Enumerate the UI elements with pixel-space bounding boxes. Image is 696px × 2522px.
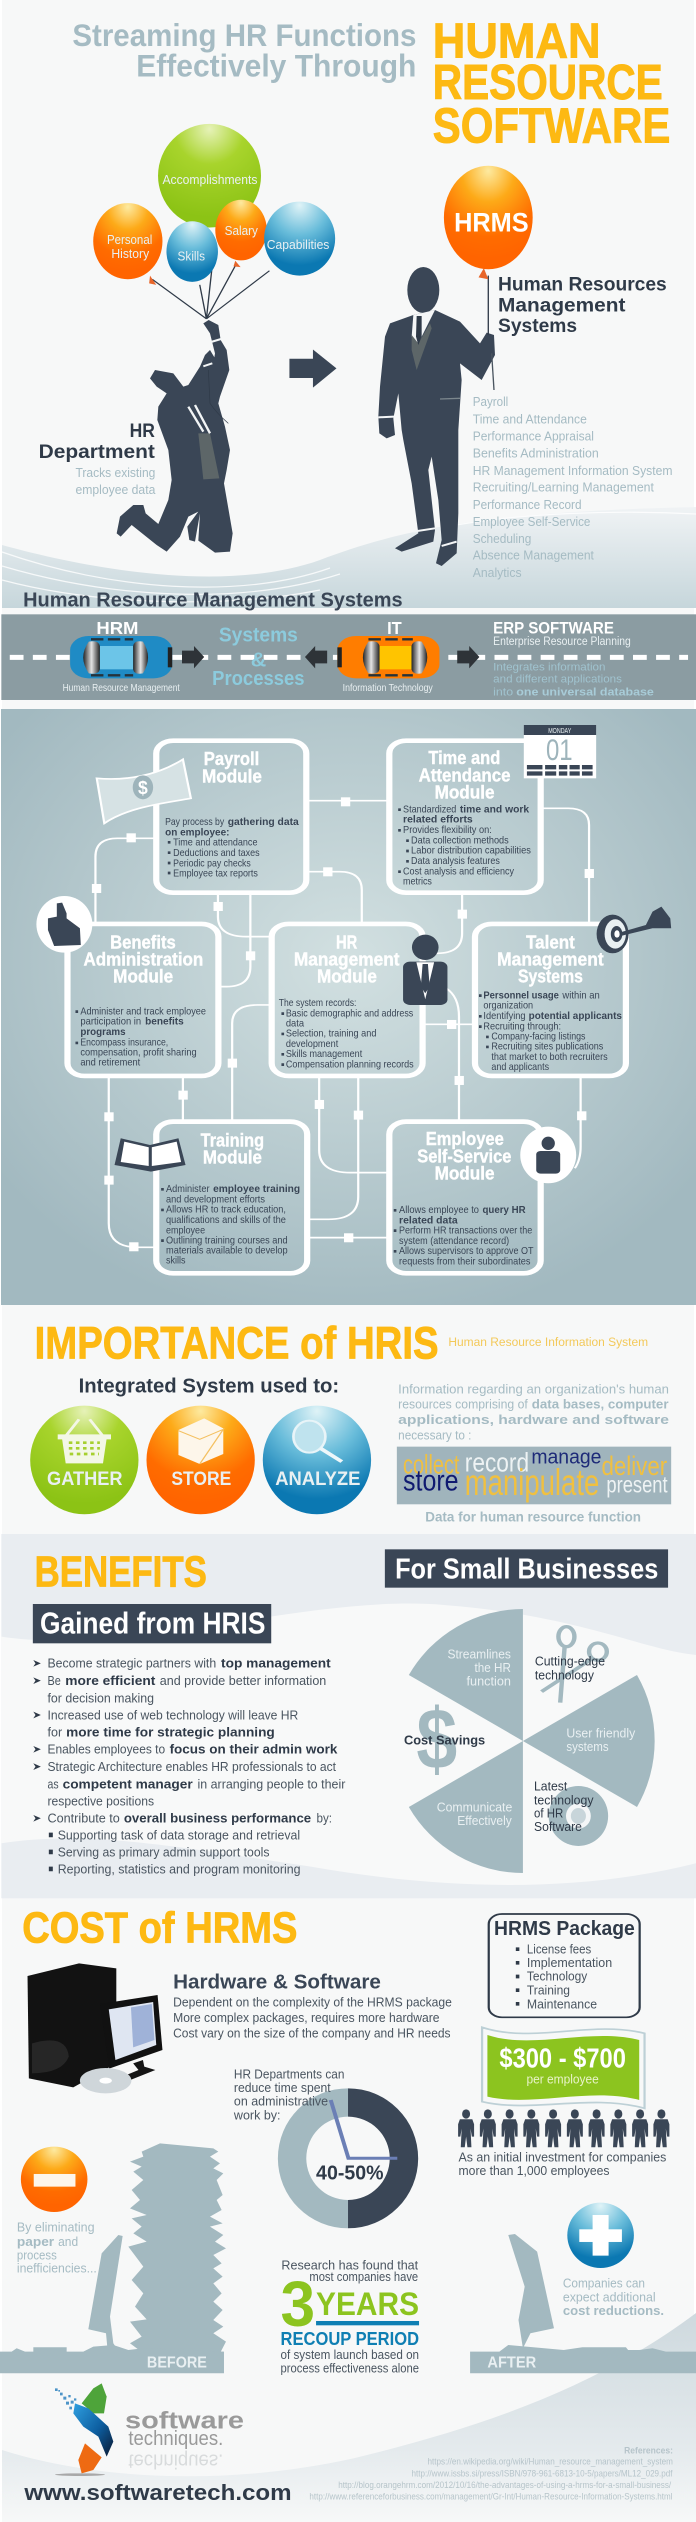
text: talent management: Personnel usage <box>483 990 559 1001</box>
text: training module: employee <box>166 1225 205 1236</box>
stat: 3 years recoup period: YEARS <box>316 2286 419 2322</box>
module titles: Training <box>201 1130 264 1151</box>
text: initial investment: more than 1,000 employees <box>459 2164 610 2178</box>
icon: computer tower and monitor <box>28 1963 162 2093</box>
title: streaming HR functions <box>72 19 416 84</box>
text: benefits module: benefits <box>145 1016 184 1027</box>
text: information regarding: necessary to : <box>398 1429 471 1443</box>
module titles: HR <box>336 931 357 953</box>
list: benefits gained: overall business performance <box>124 1812 311 1826</box>
list: HRMS functions: Absence Management <box>473 549 594 563</box>
icon: calendar: MONDAY <box>548 726 571 735</box>
before scene: paper stack, monitor and desk <box>0 2143 226 2373</box>
icon: HR manager <box>403 935 447 1005</box>
list: benefits gained: in arranging people to their <box>198 1777 345 1792</box>
text: training module: Administer <box>166 1183 210 1194</box>
connector lines <box>95 801 589 1247</box>
list: benefits gained: more time for strategic planning <box>66 1726 275 1740</box>
text: time and attendance module: Data analysis features <box>411 855 500 867</box>
text: hardware and software <box>173 1970 452 2041</box>
list: benefits gained: Contribute to <box>47 1812 120 1826</box>
text: talent management: that market to both recruiters <box>491 1051 608 1063</box>
icon: minus balloon <box>21 2147 87 2212</box>
arrow: HR department to HRMS <box>289 350 336 388</box>
list: benefits gained: Serving as primary admin support tools <box>58 1846 270 1860</box>
pie labels: function <box>467 1675 511 1689</box>
list: HRMS functions: Payroll <box>473 395 508 410</box>
module titles: Module <box>317 966 377 987</box>
module titles: Benefits <box>110 931 176 953</box>
title: streaming HR functions: Streaming HR Functions <box>72 19 416 53</box>
icon: calendar: 01 <box>546 735 573 767</box>
module titles: Self-Service <box>417 1145 511 1167</box>
logo: software techniques: techniques. <box>128 2428 223 2450</box>
heading: importance of HRIS: IMPORTANCE of HRIS <box>35 1318 439 1369</box>
panel: road of systems <box>1 589 696 700</box>
text: HR management module: Selection, training and <box>286 1028 376 1039</box>
text: by eliminating paper: inefficiencies... <box>17 2262 97 2276</box>
background wave: footer <box>2 2313 696 2522</box>
text: employee self-service module: Allows employee to <box>399 1204 479 1215</box>
text: hardware and software: Hardware & Software <box>173 1970 381 1993</box>
pie labels: systems <box>566 1741 609 1754</box>
banner: gained from HRIS: Gained from HRIS <box>40 1605 265 1640</box>
pie labels: of HR <box>534 1807 563 1821</box>
text: talent management: potential applicants <box>529 1010 622 1022</box>
car: orange IT <box>337 636 439 678</box>
heading: human resources management systems: Management <box>498 294 625 316</box>
car: blue HRM <box>70 636 172 678</box>
module titles: Attendance <box>419 765 510 786</box>
text: payroll module: Employee tax reports <box>173 868 258 879</box>
balloons: HR department data <box>93 124 335 285</box>
box: HRMS package: License fees <box>527 1942 591 1957</box>
module titles: Module <box>435 781 495 803</box>
heading: HR department <box>39 420 156 497</box>
word cloud: manage <box>531 1445 601 1468</box>
pie labels: Software <box>534 1821 582 1834</box>
list: benefits gained: competent manager <box>63 1777 193 1792</box>
heading: integrated system: Integrated System used to: <box>79 1375 339 1398</box>
text: hardware and software: Cost vary on the size of the company and HR needs <box>173 2026 451 2041</box>
text: payroll module <box>165 816 299 879</box>
text: HR departments can reduce: reduce time spent <box>234 2081 331 2095</box>
balloons: HR department data: Salary <box>225 224 258 239</box>
circle: analyze: ANALYZE <box>275 1467 360 1489</box>
module titles <box>83 747 604 1184</box>
list: benefits gained: top management <box>221 1657 331 1671</box>
text: benefits module: Administer and track employee <box>80 1006 206 1017</box>
heading: human resources management systems: Systems <box>498 315 577 337</box>
module titles: Employee <box>426 1128 504 1149</box>
pie labels: Cost Savings <box>404 1734 485 1748</box>
text: HR departments can reduce <box>233 2067 344 2123</box>
icon: open book <box>115 1138 186 1172</box>
banner: gained from HRIS <box>33 1604 271 1643</box>
pie labels: Effectively <box>457 1815 512 1828</box>
box: HRMS package <box>489 1914 640 2017</box>
text: HR departments can reduce: on administrative <box>234 2095 328 2109</box>
text: payroll module: on employee: <box>165 827 229 838</box>
module titles: Talent <box>526 931 575 953</box>
text: employee self-service module <box>394 1204 534 1267</box>
icon: employee <box>520 1127 576 1183</box>
list: benefits gained: Reporting, statistics and program monitoring <box>58 1863 301 1877</box>
text: employee self-service module: Perform HR transactions over the <box>399 1225 533 1236</box>
circle: gather: GATHER <box>47 1467 123 1489</box>
pie labels: Communicate <box>437 1801 512 1815</box>
text: HR departments can reduce: work by: <box>233 2108 281 2123</box>
text: hardware and software: More complex packages, requires more hardware <box>173 2011 440 2025</box>
text: time and attendance module: Cost analysis and efficiency <box>403 866 514 877</box>
heading: HR department: Department <box>39 441 155 462</box>
text: by eliminating paper: and <box>58 2235 78 2249</box>
balloons: HR department data: Capabilities <box>267 238 329 253</box>
label: ERP software: ERP SOFTWARE <box>493 619 614 638</box>
list: HRMS functions: Benefits Administration <box>473 447 599 461</box>
list: benefits gained: Become strategic partners with <box>47 1657 216 1671</box>
circle: store: STORE <box>171 1467 231 1489</box>
list: benefits gained: Strategic Architecture enables HR professionals to act <box>47 1760 337 1774</box>
list: HRMS functions: Analytics <box>473 566 522 581</box>
banner: price per employee: $300 - $700 <box>499 2042 626 2074</box>
box: HRMS package: Technology <box>527 1970 587 1984</box>
panel: benefits background <box>1 1534 696 1898</box>
text: HR management module <box>279 997 414 1070</box>
label: systems and processes: Systems <box>219 624 298 647</box>
icon row: employees <box>458 2109 669 2147</box>
module titles: Module <box>203 1146 262 1168</box>
icon: money bill <box>97 759 191 823</box>
stat: 3 years recoup period: 3 <box>281 2268 315 2340</box>
list: benefits gained: Be <box>47 1674 61 1688</box>
text: training module: qualifications and skills of the <box>166 1214 286 1225</box>
text: talent management: and applicants <box>491 1061 549 1073</box>
balloons: HR department data: History <box>111 247 150 261</box>
text: talent management <box>479 990 622 1073</box>
logo: software techniques: techniques. <box>128 2449 223 2471</box>
label: systems and processes: & <box>251 649 266 672</box>
pie labels: Cutting-edge <box>535 1655 605 1669</box>
text: training module: materials available to develop <box>166 1245 288 1256</box>
stat: 3 years recoup period <box>281 2258 419 2376</box>
list: benefits gained: respective positions <box>47 1794 154 1809</box>
module titles: Systems <box>518 966 583 987</box>
circle: store <box>146 1406 255 1514</box>
list: benefits gained: Increased use of web technology will leave HR <box>47 1708 298 1723</box>
icon: target and dart <box>597 907 671 953</box>
label: systems and processes: Processes <box>212 667 305 690</box>
list: benefits gained: for decision making <box>47 1691 154 1706</box>
heading: cost of HRMS: COST of HRMS <box>22 1904 297 1952</box>
text: payroll module: Pay process by <box>165 816 224 828</box>
label: ERP software <box>493 619 654 698</box>
text: HR management module: data <box>286 1018 304 1029</box>
text: benefits module: compensation, profit sharing <box>80 1047 197 1058</box>
circle: analyze <box>263 1406 371 1514</box>
pie labels: Latest <box>534 1780 568 1794</box>
text: hardware and software: Dependent on the complexity of the HRMS package <box>173 1996 452 2010</box>
stat: 3 years recoup period: Research has found that <box>281 2258 419 2273</box>
label: ERP software: into <box>493 685 513 698</box>
text: companies can expect: Companies can <box>563 2277 645 2291</box>
website url: www.softwaretech.com <box>23 2481 292 2505</box>
silhouette: kneeling man <box>117 320 233 553</box>
list: HRMS functions: Performance Appraisal <box>473 430 594 444</box>
pie labels: technology <box>535 1669 594 1683</box>
module titles: Module <box>435 1162 495 1184</box>
list: HRMS functions: Employee Self-Service <box>473 515 590 530</box>
text: HR management module: Basic demographic and address <box>286 1008 413 1019</box>
text: by eliminating paper <box>17 2221 97 2276</box>
label: HRM: Human Resource Management <box>63 682 180 694</box>
banner: price per employee <box>482 2027 645 2108</box>
after scene: monitor and desk <box>470 2234 696 2373</box>
text: initial investment <box>459 2151 666 2178</box>
text: training module: Allows HR to track education, <box>166 1204 286 1215</box>
text: information regarding: applications, hardware and software <box>398 1414 669 1427</box>
panel: importance of HRIS <box>30 1318 671 1525</box>
icon: compact disc <box>549 1786 608 1846</box>
icon: money bill: $ <box>138 777 148 798</box>
text: time and attendance module: metrics <box>403 876 432 887</box>
balloons: HR department data: Accomplishments <box>162 173 257 187</box>
list: benefits gained: for <box>47 1726 62 1740</box>
list: benefits gained: focus on their admin work <box>170 1743 338 1757</box>
text: training module: Outlining training courses and <box>166 1235 288 1246</box>
heading: human resources management systems: Human Resources <box>498 273 667 295</box>
heading: HR department: Tracks existing <box>75 466 155 481</box>
label: systems and processes <box>212 624 305 690</box>
list: HRMS functions: Scheduling <box>473 532 531 547</box>
road dashes <box>10 650 688 665</box>
text: talent management: within an <box>562 990 600 1001</box>
pie labels: Streamlines <box>447 1648 511 1662</box>
icon: thumbs up <box>36 896 92 953</box>
heading: benefits: BENEFITS <box>35 1548 207 1596</box>
arrow: IT to systems <box>305 646 327 668</box>
list: benefits gained <box>33 1657 345 1877</box>
panel: benefits <box>33 1548 668 1877</box>
text: employee self-service module: related data <box>399 1215 458 1226</box>
label: before: BEFORE <box>147 2354 207 2371</box>
box: HRMS package: Training <box>527 1983 570 1998</box>
circle: gather <box>30 1406 138 1514</box>
pie labels: User friendly <box>566 1727 636 1741</box>
box: HRMS package: Implementation <box>527 1956 612 1970</box>
module titles: Payroll <box>204 748 259 769</box>
arrow: HRM to systems <box>182 646 204 668</box>
road <box>1 614 696 700</box>
text: employee self-service module: requests from their subordinates <box>399 1256 531 1267</box>
text: HR management module: Compensation planning records <box>286 1059 414 1070</box>
text: companies can expect: cost reductions. <box>563 2304 664 2318</box>
label: IT: Information Technology <box>343 682 433 694</box>
balloon strings <box>152 263 488 335</box>
label: HRM <box>63 620 180 694</box>
text: time and attendance module: Data collection methods <box>411 835 509 846</box>
text: by eliminating paper: paper <box>17 2235 54 2249</box>
text: benefits module: programs <box>80 1026 126 1038</box>
list: benefits gained: and provide better information <box>160 1674 326 1688</box>
text: employee self-service module: system (attendance record) <box>399 1235 509 1246</box>
panel: modules background <box>1 709 696 1305</box>
box: HRMS package: HRMS Package <box>494 1917 635 1940</box>
box: HRMS package: Maintenance <box>527 1997 597 2012</box>
list: HRMS functions: Recruiting/Learning Management <box>473 481 654 495</box>
label: IT <box>343 620 433 694</box>
panel: header and balloons <box>39 14 673 581</box>
list: benefits gained: Supporting task of data storage and retrieval <box>58 1829 300 1843</box>
module titles: Time and <box>428 747 500 768</box>
list: HRMS functions: Performance Record <box>473 498 582 513</box>
title: human resource software: HUMAN <box>433 14 601 68</box>
label: ERP software: one universal database <box>516 685 654 698</box>
list: benefits gained: as <box>47 1777 59 1792</box>
text: HR departments can reduce: HR Departments can <box>234 2067 344 2082</box>
text: time and attendance module: Labor distribution capabilities <box>411 845 531 856</box>
references: References: <box>624 2446 673 2456</box>
module titles: Module <box>113 966 173 987</box>
module titles: Management <box>497 949 604 970</box>
logo: software techniques <box>55 2383 244 2476</box>
text: payroll module: Deductions and taxes <box>173 847 260 859</box>
module titles: Administration <box>83 949 203 970</box>
panel: HR modules <box>36 725 671 1273</box>
text: employee self-service module: Allows supervisors to approve OT <box>399 1245 534 1256</box>
text: training module: skills <box>166 1255 186 1266</box>
icon: calendar <box>524 725 596 778</box>
list: benefits gained: more efficient <box>65 1674 156 1688</box>
pie labels <box>404 1648 636 1834</box>
heading: HR department: HR <box>130 420 155 442</box>
donut chart: 40-50%: 40-50% <box>316 2161 384 2184</box>
module titles: Management <box>294 949 400 970</box>
text: time and attendance module: Provides flexibility on: <box>403 824 492 836</box>
panel: savings and footer <box>17 2221 673 2505</box>
balloons: HR department data: Skills <box>178 250 205 264</box>
pie labels: technology <box>534 1794 594 1808</box>
text: companies can expect <box>563 2277 664 2318</box>
word cloud: collect <box>403 1450 460 1479</box>
title: streaming HR functions: Effectively Through <box>136 49 416 84</box>
heading: human resources management systems <box>498 273 667 337</box>
text: payroll module: gathering data <box>228 816 299 828</box>
balloon: HRMS: HRMS <box>454 208 529 238</box>
text: HR management module: The system records: <box>279 997 356 1009</box>
label: IT: IT <box>387 620 402 638</box>
references <box>309 2446 673 2502</box>
text: talent management: Company-facing listings <box>491 1031 586 1042</box>
text: time and attendance module: time and work <box>460 804 530 815</box>
text: information regarding <box>398 1383 669 1443</box>
word cloud: record <box>465 1448 529 1478</box>
text: by eliminating paper: process <box>17 2248 57 2263</box>
title: human resource software <box>433 14 670 153</box>
label: after: AFTER <box>487 2354 536 2371</box>
text: talent management: organization <box>483 1000 533 1011</box>
word cloud: store <box>403 1465 459 1497</box>
text: payroll module: Periodic pay checks <box>173 858 251 869</box>
list: HRMS functions: Time and Attendance <box>473 413 587 427</box>
text: benefits module: participation in <box>80 1016 141 1027</box>
text: training module: employee training <box>213 1183 300 1194</box>
stat: 3 years recoup period: RECOUP PERIOD <box>281 2328 419 2349</box>
text: talent management: Recruiting through: <box>483 1021 561 1032</box>
text: benefits module: and retirement <box>80 1057 141 1068</box>
text: benefits module <box>75 1006 206 1068</box>
label: ERP software: and different applications <box>493 672 622 685</box>
silhouette: standing man <box>378 267 495 566</box>
arrow: IT to ERP <box>457 646 479 668</box>
connector nodes <box>92 797 594 1251</box>
icon: plus balloon <box>567 2203 634 2268</box>
text: talent management: Identifying <box>483 1010 526 1022</box>
pie labels: the HR <box>475 1662 511 1675</box>
heading: human resource management systems: Human Resource Management Systems <box>23 589 403 611</box>
text: companies can expect: expect additional <box>563 2290 656 2305</box>
list: benefits gained: Enables employees to <box>47 1743 165 1757</box>
pie chart: small business benefits <box>404 1609 655 1873</box>
balloons: HR department data: Personal <box>107 233 152 248</box>
donut chart: 40-50% <box>278 2088 418 2228</box>
stat: 3 years recoup period: most companies have <box>309 2270 418 2284</box>
text: training module: and development efforts <box>166 1194 265 1205</box>
text: HR management module: development <box>286 1038 339 1050</box>
icon: dollar sign: $ <box>416 1690 457 1787</box>
label: HRM: HRM <box>96 620 138 638</box>
text: training module <box>161 1183 300 1266</box>
text: talent management: Recruiting sites publications <box>491 1041 603 1052</box>
logo: software techniques: software <box>125 2407 244 2434</box>
text: HR management module: Skills management <box>286 1048 363 1060</box>
text: time and attendance module <box>398 804 531 887</box>
text: payroll module: Time and attendance <box>173 837 258 848</box>
text: information regarding: resources comprising of <box>398 1398 528 1412</box>
banner: price per employee: per employee <box>526 2072 599 2087</box>
word cloud <box>397 1445 671 1504</box>
text: time and attendance module: related efforts <box>403 814 473 825</box>
stat: 3 years recoup period: process effectiveness alone <box>281 2362 419 2376</box>
text: employee self-service module: query HR <box>483 1204 526 1215</box>
background wave: header <box>2 507 696 608</box>
text: time and attendance module: Standardized <box>403 804 456 815</box>
list: benefits gained: by: <box>317 1812 332 1826</box>
list: HRMS functions <box>473 395 673 581</box>
heading: HR department: employee data <box>75 483 156 497</box>
label: ERP software: Integrates information <box>493 660 605 673</box>
text: by eliminating paper: By eliminating <box>17 2221 95 2235</box>
text: benefits module: Encompass insurance, <box>80 1037 168 1048</box>
panel: cost of HRMS <box>21 1904 696 2373</box>
icon: scissors <box>542 1627 607 1703</box>
balloon: HRMS <box>444 166 533 279</box>
stat: 3 years recoup period: of system launch based on <box>281 2349 419 2362</box>
module titles: Module <box>202 765 262 787</box>
module boxes <box>67 741 626 1273</box>
